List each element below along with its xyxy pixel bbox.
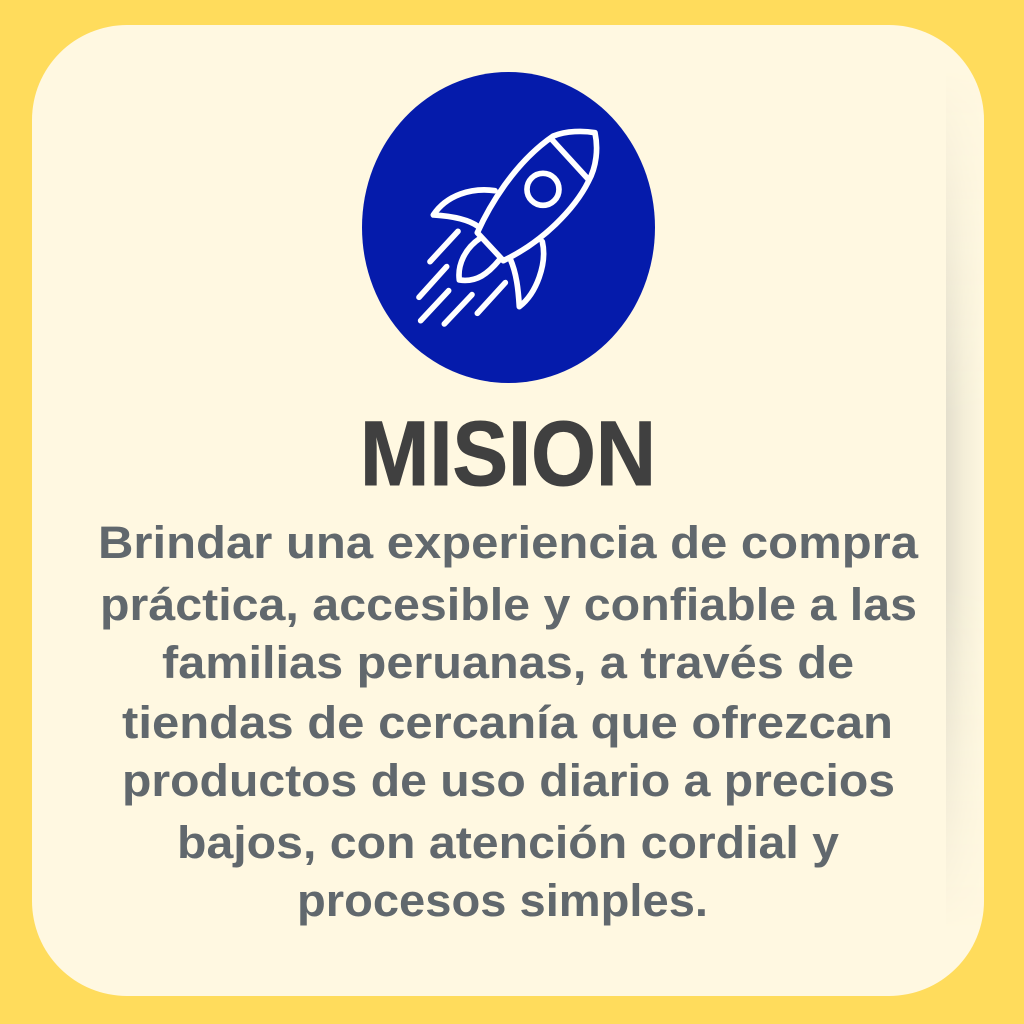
- text block: mission statement: procesos simples.: [297, 875, 708, 926]
- title: MISION: [360, 403, 656, 505]
- icon: rocket in blue circle: [362, 72, 655, 383]
- text block: mission statement: [98, 517, 919, 926]
- text block: mission statement: familias peruanas, a través de: [162, 637, 854, 688]
- text block: mission statement: práctica, accesible y confiable a las: [100, 579, 917, 630]
- text block: mission statement: tiendas de cercanía que ofrezcan: [122, 697, 893, 748]
- text block: mission statement: productos de uso diario a precios: [122, 755, 895, 806]
- text block: mission statement: bajos, con atención cordial y: [177, 817, 839, 868]
- text block: mission statement: Brindar una experiencia de compra: [98, 517, 919, 568]
